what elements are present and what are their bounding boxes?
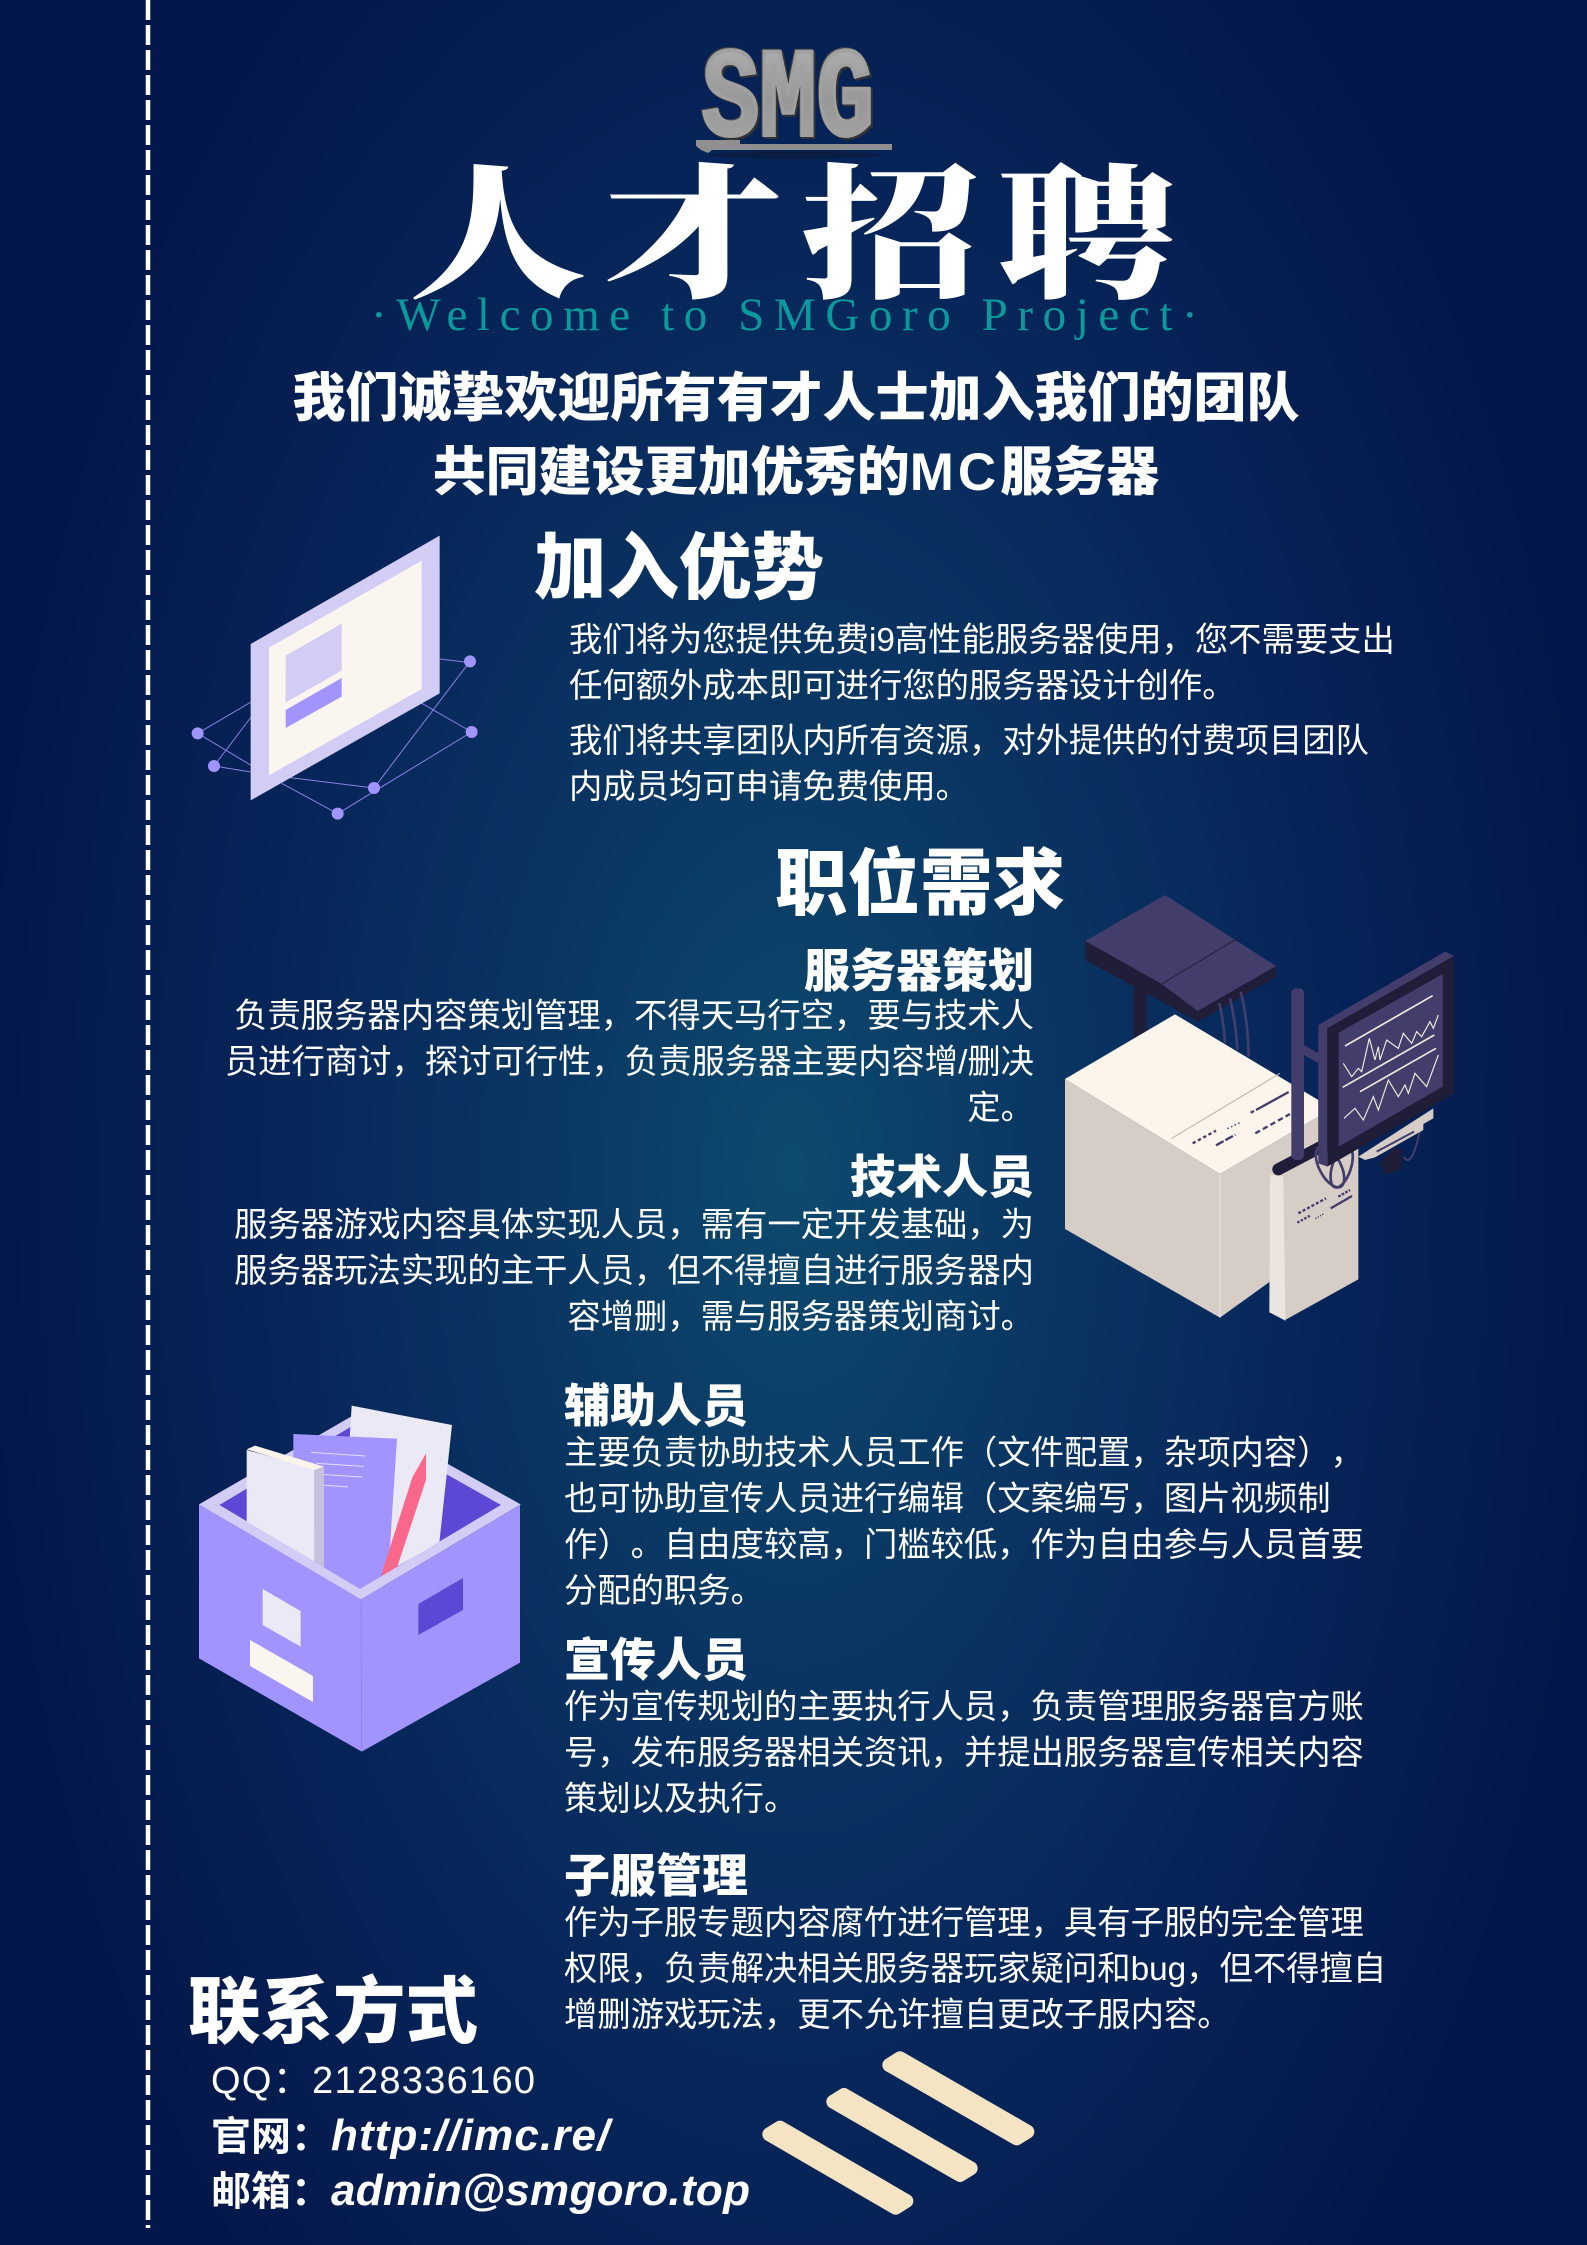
text: advantage two: 内成员均可申请免费使用。 [569,769,969,806]
panel: contact [188,1972,750,2215]
intro heading [292,369,1300,502]
heading: advantages: 加入优势 [534,528,824,609]
illustration: isometric screen with network [192,536,478,820]
text: publicity description: 号，发布服务器相关资讯，并提出服务器宣传相关内容 [564,1735,1364,1772]
text: technical staff description: 服务器玩法实现的主干人员，但不得擅自进行服务器内 [234,1253,1034,1290]
illustration: server, router and monitor [1065,895,1454,1321]
panel: role publicity [564,1634,1364,1818]
intro heading: 共同建设更加优秀的MC服务器 [433,443,1159,502]
heading: publicity: 宣传人员 [564,1634,748,1686]
text: technical staff description [234,1207,1034,1336]
contact: QQ: QQ：2128336160 [211,2060,536,2102]
intro heading: 我们诚挚欢迎所有有才人士加入我们的团队 [292,369,1300,428]
text: server planner description: 员进行商讨，探讨可行性，负责服务器主要内容增/删决 [225,1044,1034,1081]
text: assistant description: 作）。自由度较高，门槛较低，作为自由参与人员首要 [564,1527,1364,1564]
text: server planner description [225,998,1034,1127]
text: advantage one: 任何额外成本即可进行您的服务器设计创作。 [569,668,1236,705]
heading: assistant: 辅助人员 [564,1380,748,1432]
panel: role server planner [225,945,1034,1127]
text: technical staff description: 容增删，需与服务器策划商讨。 [567,1299,1034,1336]
text: server planner description: 定。 [967,1090,1034,1127]
decoration: three cream stripes [762,2051,1034,2215]
text: assistant description [564,1435,1364,1610]
logo: SMG: SMG [702,30,874,173]
heading: server planner: 服务器策划 [804,945,1034,997]
text: advantage two: 我们将共享团队内所有资源，对外提供的付费项目团队 [569,723,1369,760]
heading: contact: 联系方式 [188,1972,478,2053]
text: publicity description: 作为宣传规划的主要执行人员，负责管理服务器官方账 [564,1689,1364,1726]
text: advantage one [569,622,1395,705]
panel: role technical staff [234,1151,1034,1336]
text: publicity description: 策划以及执行。 [564,1781,797,1818]
text: sub-server manager description: 增删游戏玩法，更不允许擅自更改子服内容。 [564,1997,1231,2034]
text: technical staff description: 服务器游戏内容具体实现人员，需有一定开发基础，为 [234,1207,1034,1244]
text: assistant description: 分配的职务。 [564,1573,764,1610]
text: publicity description [564,1689,1364,1818]
illustration: purple box of documents [199,1406,521,1752]
subtitle: welcome line: ·Welcome to SMGoro Project· [371,289,1207,341]
title: 人才招聘 [408,120,1193,328]
contact: email: 邮箱：admin@smgoro.top [211,2166,750,2215]
text: sub-server manager description: 作为子服专题内容腐竹进行管理，具有子服的完全管理 [564,1905,1364,1942]
heading: sub-server manager: 子服管理 [564,1850,748,1902]
text: server planner description: 负责服务器内容策划管理，不得天马行空，要与技术人 [234,998,1034,1035]
text: advantage two [569,723,1369,806]
heading: technical staff: 技术人员 [850,1151,1034,1203]
text: advantage one: 我们将为您提供免费i9高性能服务器使用，您不需要支出 [569,622,1395,659]
text: assistant description: 主要负责协助技术人员工作（文件配置，杂项内容）， [564,1435,1364,1472]
contact: website: 官网：http://imc.re/ [211,2111,610,2160]
text: sub-server manager description: 权限，负责解决相关服务器玩家疑问和bug，但不得擅自 [564,1951,1386,1988]
panel: role assistant [564,1380,1364,1610]
text: sub-server manager description [564,1905,1386,2034]
panel: join advantages [534,528,1395,806]
panel: role sub-server manager [564,1850,1386,2034]
heading: positions: 职位需求 [775,844,1065,925]
text: assistant description: 也可协助宣传人员进行编辑（文案编写，图片视频制 [564,1481,1331,1518]
